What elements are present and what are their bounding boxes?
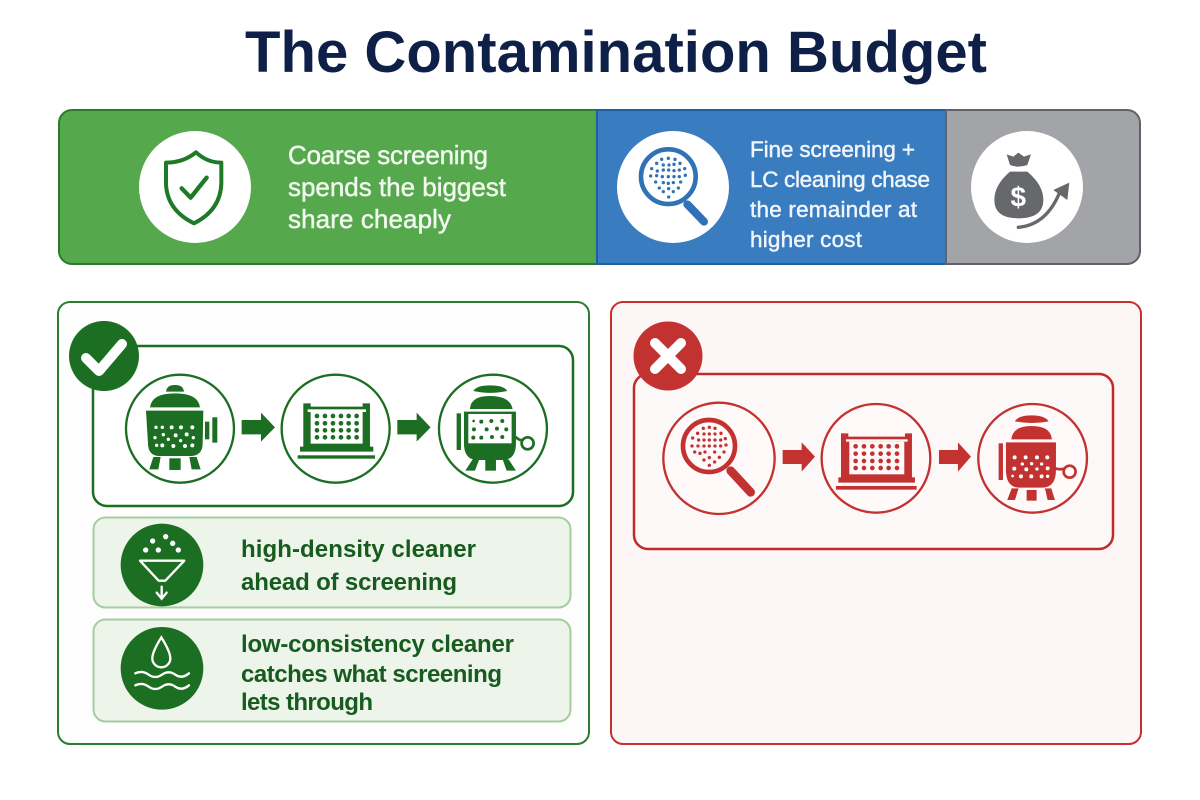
step 1: vessel icon [126,375,234,483]
badge: check [69,321,139,391]
arrow [783,442,815,472]
text: coarse screening: spends the biggest [288,172,507,202]
text: fine screening [750,137,930,252]
text: high-density cleaner: high-density cleaner [241,536,476,563]
process flow: green [93,346,573,506]
icon: money bag: $ [1011,181,1027,212]
process flow: red [634,374,1113,549]
text: fine screening: the remainder at [750,197,918,222]
icon: water drop and waves [121,627,203,710]
icon: shield [139,131,251,243]
panel: discouraged sequence [611,302,1141,744]
text: fine screening: LC cleaning chase [750,167,930,192]
step 2: screen icon [282,375,390,483]
budget bar [59,110,1140,264]
text: coarse screening [288,140,507,234]
arrow [397,413,431,442]
icon: magnifier [617,131,729,243]
text: coarse screening: Coarse screening [288,140,488,170]
badge: cross [634,322,702,390]
arrow [939,442,971,472]
text: low-consistency cleaner: low-consistency cleaner [241,631,514,658]
icon: funnel [121,524,203,606]
step 1: magnifier icon [663,403,775,514]
segment: coarse screening [59,110,597,264]
text: low-consistency cleaner: lets through [241,689,373,716]
title: The Contamination Budget [245,20,987,85]
text: high-density cleaner: ahead of screening [241,569,457,596]
step 3: vessel icon [439,375,547,483]
text: fine screening: higher cost [750,227,863,252]
note: low-consistency cleaner [94,620,570,722]
panel: recommended sequence [58,302,589,744]
text: coarse screening: share cheaply [288,204,451,234]
icon: money bag [971,131,1083,243]
text: low-consistency cleaner [241,631,514,716]
step 2: screen icon [822,404,930,513]
segment: fine screening [597,110,946,264]
text: low-consistency cleaner: catches what screening [241,661,502,688]
arrow [242,413,275,442]
note: high-density cleaner [94,518,570,608]
step 3: vessel icon [978,404,1087,513]
text: high-density cleaner [241,536,476,596]
segment: cost [946,110,1140,264]
text: fine screening: Fine screening + [750,137,915,162]
